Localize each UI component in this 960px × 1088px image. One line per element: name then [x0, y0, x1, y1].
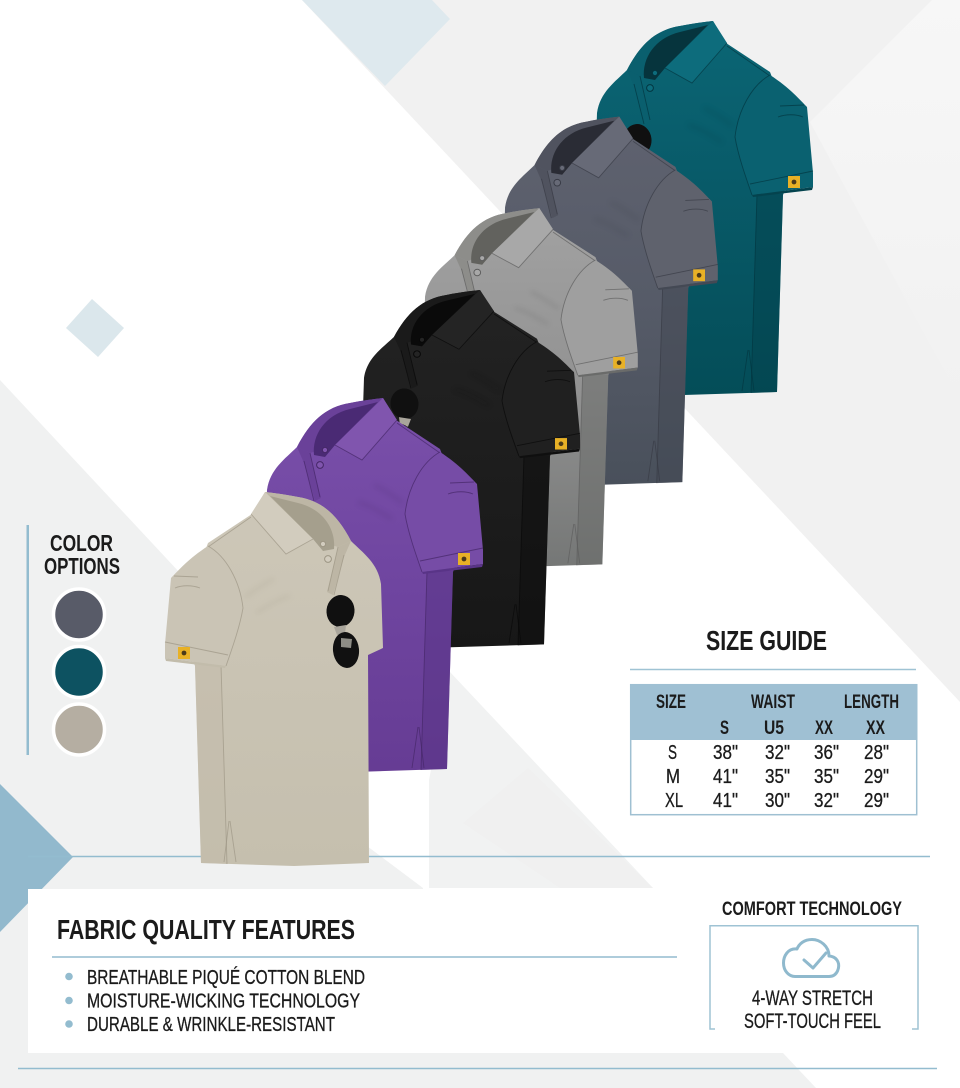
size table: 36": [814, 742, 839, 764]
heading: color options: [44, 530, 120, 579]
shirt: khaki polo with sunglasses: [165, 492, 383, 866]
panel: comfort technology: [710, 898, 918, 1033]
comfort text: 4-WAY STRETCH: [752, 987, 873, 1010]
size table: 29": [864, 766, 889, 788]
size table: 35": [814, 766, 839, 788]
size table: 29": [864, 790, 889, 812]
size table: SIZE: [656, 692, 686, 713]
size table: WAIST: [751, 692, 795, 713]
size table: XL: [665, 790, 683, 812]
panel: fabric quality features: [28, 889, 960, 1053]
swatch: khaki: [54, 704, 104, 755]
size table: 32": [765, 742, 790, 764]
panel: color options: [26, 525, 120, 755]
swatch: slate: [54, 589, 104, 640]
shirt: black polo: [362, 290, 580, 647]
shirt: purple polo: [265, 398, 483, 772]
size table: U5: [764, 718, 784, 739]
heading: fabric quality features: FABRIC QUALITY FEATURES: [57, 914, 355, 945]
size table: 30": [765, 790, 790, 812]
size table: XX: [815, 718, 833, 739]
size table: S: [720, 718, 729, 739]
heading: color options: COLOR: [50, 530, 113, 556]
size table: 28": [864, 742, 889, 764]
decorative pale-blue shape top: [302, 0, 450, 86]
heading: comfort technology: COMFORT TECHNOLOGY: [722, 898, 902, 920]
size table: 41": [713, 790, 738, 812]
feature list: MOISTURE-WICKING TECHNOLOGY: [87, 990, 360, 1012]
size table: M: [666, 766, 680, 788]
decorative pale-blue diamond: [66, 299, 124, 357]
shirt: slate grey polo: [503, 117, 718, 485]
feature list: BREATHABLE PIQUÉ COTTON BLEND: [87, 966, 365, 989]
size table: 38": [713, 742, 738, 764]
shirt: light grey polo: [423, 208, 638, 567]
decorative blue triangle: [0, 784, 73, 932]
size table: 41": [713, 766, 738, 788]
size table: [630, 684, 918, 815]
size table: XX: [866, 718, 885, 739]
icon: cloud with check: [784, 940, 839, 976]
size table: S: [668, 742, 677, 764]
panel: size guide: [630, 625, 918, 815]
size table: 32": [814, 790, 839, 812]
shirt: teal polo: [595, 21, 813, 395]
heading: size guide: SIZE GUIDE: [706, 625, 827, 656]
swatch: teal: [54, 646, 104, 698]
heading: color options: OPTIONS: [44, 553, 120, 579]
size table: LENGTH: [844, 692, 899, 713]
comfort text: SOFT-TOUCH FEEL: [744, 1010, 881, 1033]
feature list: DURABLE & WRINKLE-RESISTANT: [87, 1014, 335, 1036]
feature list: [65, 966, 365, 1036]
comfort text: [744, 987, 881, 1033]
size table: 35": [765, 766, 790, 788]
